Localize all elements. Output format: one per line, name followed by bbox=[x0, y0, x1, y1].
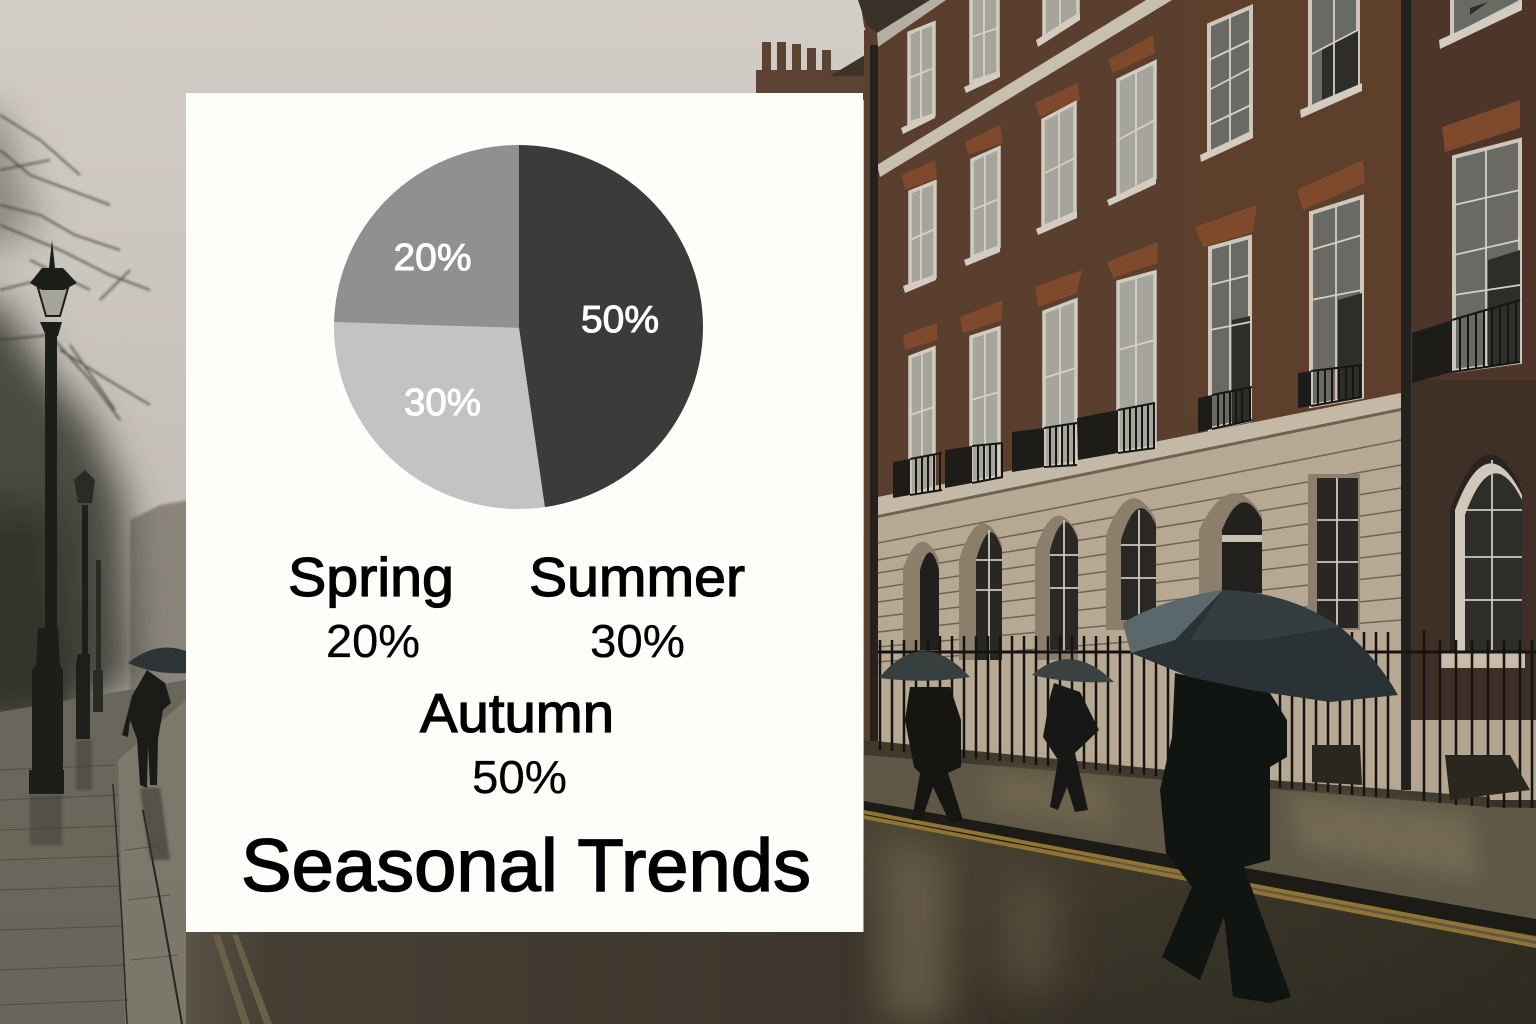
legend: autumn bbox=[420, 682, 614, 803]
right bay sill behind railing bbox=[1440, 652, 1525, 668]
legend: autumn: Autumn bbox=[420, 682, 614, 744]
basement steps bbox=[1312, 745, 1530, 800]
slice: summer 30% bbox=[334, 322, 545, 509]
legend: autumn: 50% bbox=[472, 751, 567, 803]
lamp reflections bbox=[30, 795, 62, 845]
pedestrian 2 with umbrella bbox=[1032, 659, 1114, 812]
arched ground-floor openings bbox=[903, 454, 1522, 660]
pie label 50%: 50% bbox=[581, 299, 659, 341]
pavement bbox=[0, 680, 190, 1024]
street lamp 2 bbox=[74, 470, 95, 739]
slice: spring 20% bbox=[334, 145, 519, 328]
pie chart bbox=[334, 145, 703, 509]
legend: spring bbox=[288, 546, 454, 667]
ground-floor glazing bars bbox=[976, 460, 1522, 660]
legend: summer: 30% bbox=[590, 615, 685, 667]
legend: spring: 20% bbox=[326, 615, 420, 667]
window sills bbox=[901, 2, 1522, 293]
darker upper windows bbox=[1209, 0, 1520, 429]
string course bbox=[877, 0, 1172, 177]
chimney stack bbox=[756, 42, 872, 100]
tree mass bbox=[0, 100, 135, 740]
orange lintels bbox=[902, 35, 1520, 350]
background: left street scene bbox=[0, 100, 190, 1024]
main pedestrian bbox=[1123, 590, 1398, 1003]
pavement, kerb and road bbox=[186, 740, 1536, 1024]
upper windows bbox=[909, 0, 1155, 495]
street lamp 1 bbox=[29, 240, 77, 794]
pedestrian 1 with umbrella bbox=[879, 651, 970, 823]
street lamp 3 bbox=[93, 560, 103, 712]
legend: spring: Spring bbox=[288, 546, 454, 608]
cornice bbox=[858, 0, 930, 33]
iron balconies bbox=[893, 320, 1452, 498]
pie label 20%: 20% bbox=[394, 237, 472, 279]
railings bbox=[878, 630, 1536, 808]
pie label 30%: 30% bbox=[404, 382, 481, 424]
distant buildings in fog bbox=[130, 500, 190, 690]
distant pedestrian with umbrella bbox=[122, 647, 186, 788]
building: brick facade bbox=[858, 0, 1536, 810]
stucco ground floor bbox=[878, 393, 1536, 800]
bare branches bbox=[0, 115, 150, 420]
large umbrella bbox=[1123, 590, 1398, 702]
balcony railing bars bbox=[910, 300, 1520, 495]
slice: autumn 50% bbox=[519, 145, 703, 508]
downpipes bbox=[870, 0, 1411, 790]
title: Seasonal Trends bbox=[241, 824, 811, 907]
legend: summer: Summer bbox=[529, 546, 745, 608]
dark lower sashes bbox=[1232, 2, 1520, 424]
legend: summer bbox=[529, 546, 745, 667]
window glazing bars bbox=[909, 0, 1520, 492]
panel: white chart card bbox=[186, 93, 863, 932]
